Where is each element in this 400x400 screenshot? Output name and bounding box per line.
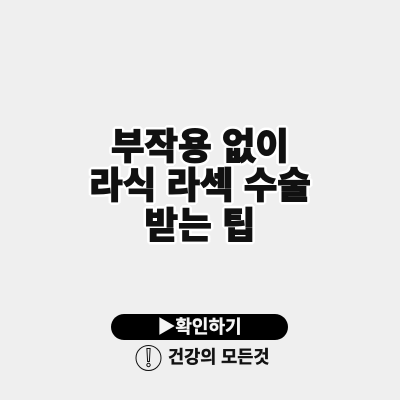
button: confirm: ▶확인하기 <box>157 317 242 337</box>
title: 받는 팁 <box>145 205 255 246</box>
title: 부작용 없이 <box>111 126 289 167</box>
icon: exclamation circle <box>136 345 162 371</box>
title <box>88 125 312 246</box>
brand name: 건강의 모든것 <box>168 347 269 367</box>
title: 라식 라섹 수술 <box>89 165 311 206</box>
button: confirm <box>111 314 288 340</box>
